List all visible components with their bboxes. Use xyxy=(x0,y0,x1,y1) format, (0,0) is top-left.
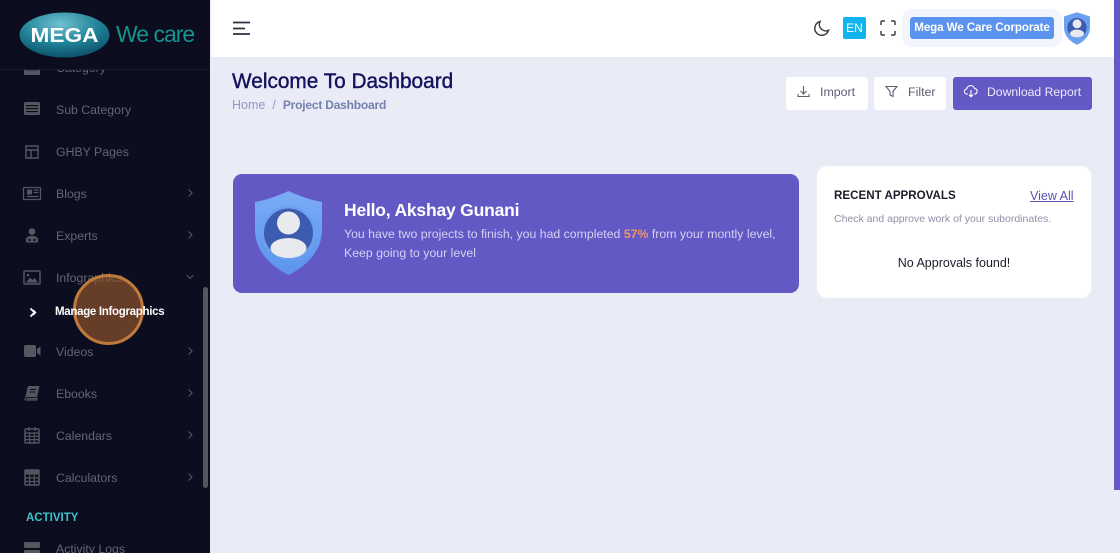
section label: ACTIVITY: ACTIVITY xyxy=(26,512,78,524)
menu item: Blogs xyxy=(22,186,193,201)
sidebar xyxy=(0,0,210,553)
panel: recent approvals xyxy=(817,166,1091,298)
banner text: You have two projects to finish, you had completed 57% from your montly level, xyxy=(344,227,776,241)
banner text: Keep going to your level xyxy=(344,246,476,260)
menu item: Infographics: Infographics xyxy=(56,271,123,285)
button: Filter: Filter xyxy=(908,85,936,99)
menu item: Sub Category xyxy=(24,102,131,117)
button: Download Report xyxy=(953,77,1092,110)
button: Import: Import xyxy=(820,85,855,99)
icon: filter xyxy=(885,86,898,98)
user name label xyxy=(910,17,1054,39)
language badge: EN xyxy=(846,21,863,35)
menu item: Calculators: Calculators xyxy=(56,471,118,485)
language badge xyxy=(843,17,866,39)
label: Manage Infographics: Manage Infographics xyxy=(55,306,164,318)
breadcrumb: Home / Project Dashboard xyxy=(232,98,386,112)
approvals subtitle: Check and approve work of your subordinates. xyxy=(834,213,1051,225)
page title: Welcome To Dashboard xyxy=(232,70,453,93)
menu item: Videos: Videos xyxy=(56,345,93,359)
logo bar xyxy=(0,0,210,70)
menu item: Calendars: Calendars xyxy=(56,429,112,443)
icon: fullscreen xyxy=(880,20,896,36)
button: Filter xyxy=(874,77,946,110)
sidebar scrollbar xyxy=(203,287,208,488)
menu item: Experts xyxy=(26,228,193,243)
menu item: Ebooks: Ebooks xyxy=(56,387,97,401)
menu item: Blogs: Blogs xyxy=(56,187,87,201)
approvals heading: RECENT APPROVALS xyxy=(834,189,956,202)
click highlight circle xyxy=(73,274,144,345)
logo: MEGA oval xyxy=(20,12,110,58)
link: View All: View All xyxy=(1030,189,1074,203)
logo: MEGA oval: MEGA xyxy=(30,25,98,47)
menu item: Category xyxy=(24,61,106,75)
logo: We care: We care xyxy=(116,21,194,47)
panel: welcome banner xyxy=(233,174,799,293)
icon: hamburger menu xyxy=(233,22,250,35)
menu item: Calendars xyxy=(24,427,193,444)
user name pill xyxy=(902,9,1062,47)
menu item: Sub Category: Sub Category xyxy=(56,103,131,117)
menu item: Videos xyxy=(24,345,193,359)
submenu item: Manage Infographics xyxy=(30,306,164,318)
menu item: Infographics xyxy=(23,270,194,285)
icon: download xyxy=(797,86,810,97)
icon: double chevron xyxy=(30,308,36,318)
icon: user shield avatar xyxy=(1064,12,1090,45)
right page scrollbar xyxy=(1114,0,1120,490)
user name label: Mega We Care Corporate xyxy=(914,21,1050,34)
menu item: GHBY Pages: GHBY Pages xyxy=(56,145,129,159)
banner text xyxy=(344,227,776,260)
icon: shield user xyxy=(255,191,322,275)
top header bar xyxy=(211,0,1120,57)
banner heading: Hello, Akshay Gunani xyxy=(344,200,519,220)
menu item: Category: Category xyxy=(56,61,106,75)
icon: cloud download xyxy=(964,85,978,98)
menu item: Experts: Experts xyxy=(56,229,98,243)
button: Import xyxy=(786,77,868,110)
menu item: Activity Logs xyxy=(24,542,125,553)
empty state message: No Approvals found! xyxy=(898,256,1010,270)
menu item: Ebooks xyxy=(24,386,193,401)
menu item: Calculators xyxy=(24,469,193,486)
button: Download Report: Download Report xyxy=(987,85,1081,99)
icon: moon xyxy=(814,20,830,36)
